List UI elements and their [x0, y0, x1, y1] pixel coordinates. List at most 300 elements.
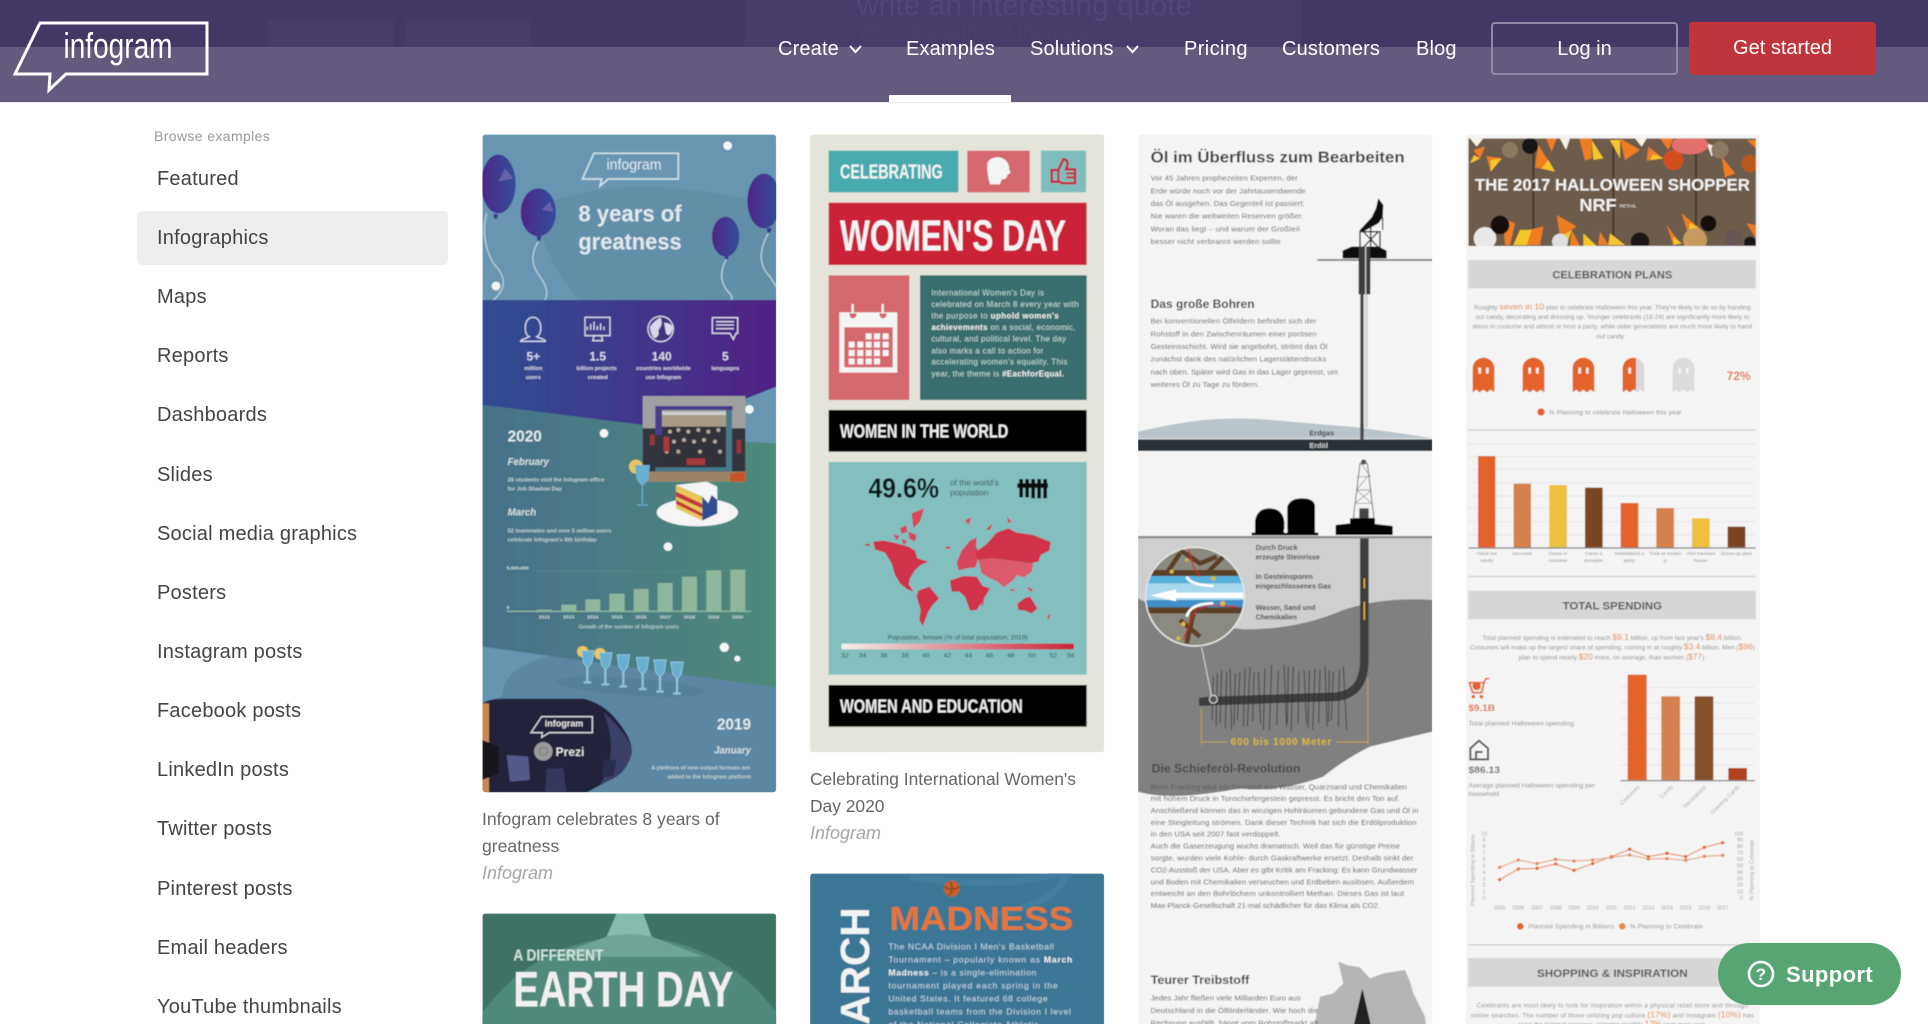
caption: Infogram celebrates 8 years: Infogram [482, 863, 553, 883]
bar chart: infogram users growth: 2019 [708, 615, 719, 621]
nav: Customers: Customers [1282, 38, 1380, 60]
line chart: spending trend: % Planning to Celebrate [1630, 924, 1703, 931]
panel: world map: 49.6% [868, 472, 939, 503]
bar chart: infogram users growth: 2015 [611, 615, 623, 621]
bar chart: spending categories: Costumes [1619, 784, 1642, 807]
sidebar navigation: Email headers [157, 937, 288, 959]
bar chart: celebration activities: Trick-or-treatin [1649, 551, 1681, 557]
sidebar navigation: Infographics [157, 227, 269, 249]
line chart: spending trend: 1 [1483, 889, 1486, 895]
heading bar: total spending [1468, 591, 1756, 619]
stat: 140 countries: use Infogram [646, 375, 681, 381]
text block: das grosse bohren: Das große Bohren [1151, 297, 1255, 311]
text block: das grosse bohren: nach oben. Später wird Gas in das Lager gepresst, um [1151, 367, 1338, 376]
text block: about women's day: cultural, and political level. The day [931, 335, 1066, 344]
caption: Infogram celebrates 8 years [482, 809, 720, 883]
panel: world map [829, 462, 1087, 675]
icon: pump jack [1343, 198, 1387, 258]
bar chart: infogram users growth: 5,000,000 [507, 566, 529, 572]
image: Prezi office photo: infogram [545, 719, 583, 729]
labels: fracking callouts: Durch Druck [1256, 545, 1298, 552]
text: 2019 timeline: A plethora of new output formats are [651, 765, 750, 771]
line chart: spending trend: 80 [1737, 844, 1743, 850]
text block: total spending: Total planned spending is estimated to reach $9.1 billion, up from last year's $8.4 billion. [1482, 632, 1743, 642]
header bar: Who's the author of the quote? [857, 22, 1103, 42]
button: Support [1718, 943, 1901, 1005]
text block: March Madness description: Madness – is a single-elimination [888, 967, 1037, 977]
icon: row of glasses [577, 646, 683, 694]
sidebar navigation [137, 128, 448, 1018]
text: 2019 timeline: 2019 [717, 717, 751, 734]
line chart: spending trend [1468, 831, 1756, 945]
panel: Women's Day infographic [810, 134, 1104, 752]
nav: Pricing: Pricing [1184, 38, 1248, 60]
text block: about women's day: also marks a call to action for [931, 346, 1044, 355]
legend: population female scale: 40 [922, 652, 930, 659]
button: Log in: Log in [1557, 38, 1612, 60]
text block: intro [1151, 174, 1306, 246]
legend: population female scale: 46 [986, 652, 993, 659]
stat: 86.13 per household: $86.13 [1468, 765, 1500, 775]
bar chart: celebration activities: g [1664, 558, 1667, 564]
text block: die schieferoel revolution: und Boden mit Chemikalien verseuchen und Erdbeben auslösen. Außerdem [1151, 877, 1414, 886]
text block: die schieferoel revolution: mit hohem Druck in Tonschiefergestein gepresst. Es bricht den Ton auf. [1151, 794, 1400, 803]
line chart: spending trend: 10 [1481, 831, 1487, 837]
heading: March Madness [832, 901, 1073, 1024]
text block: das grosse bohren: Gesteinsschicht. Wird sie angebohrt, strömt das Öl [1151, 342, 1328, 351]
icon: infogram logo small: infogram [606, 157, 661, 173]
bar chart: infogram users growth: 2013 [563, 615, 574, 621]
stat: 5 languages: languages [711, 366, 739, 372]
banner: celebrating: CELEBRATING [840, 162, 943, 184]
image: Prezi office photo [482, 699, 632, 792]
text block: March Madness description [888, 941, 1072, 1024]
nav: Create: Create [778, 38, 839, 60]
text block: about women's day: International Women's Day is [931, 289, 1044, 298]
line chart: spending trend: 10 [1737, 889, 1743, 895]
text block: celebration plans: out candy, decorating and dressing up. Younger celebrants (18-24) are significantly more likely to [1475, 314, 1750, 321]
sidebar navigation: Slides [157, 464, 213, 486]
text block: about women's day [920, 275, 1087, 400]
heading: women and education: WOMEN AND EDUCATION [840, 696, 1023, 717]
text block: March Madness description: Tournament – popularly known as March [888, 954, 1072, 964]
stat: 1.5 billion projects: 1.5 [589, 350, 606, 364]
icon: chevron create [849, 45, 862, 54]
sidebar navigation: Maps [157, 286, 207, 308]
line chart: spending trend: Planned Spending in Billions [1471, 834, 1477, 906]
legend: population female scale: 48 [1007, 652, 1015, 659]
sidebar navigation: Browse examples [154, 128, 270, 144]
text block: das grosse bohren: Rohstoff in den Zwischenräumen einer porösen [1151, 329, 1317, 338]
illustration: conventional well: Erdöl [1309, 441, 1328, 450]
line chart: spending trend: 2011 [1606, 905, 1617, 911]
labels: fracking callouts: In Gesteinsporen [1256, 574, 1313, 581]
line chart: spending trend: 0 [1740, 895, 1743, 901]
text block: about women's day: the purpose to uphold women's [931, 312, 1059, 321]
bar chart: celebration activities: Decorate [1512, 551, 1533, 557]
bar chart: spending categories: Greeting Cards [1710, 784, 1742, 816]
text: 2020 timeline [508, 428, 611, 543]
text block: das grosse bohren: zunächst dank des natürlichen Lagerstättendrucks [1151, 355, 1327, 364]
text block: die schieferoel revolution: entweicht an den Bohrlöchern unkontrolliert Methan. Dieses Gas ist laut [1151, 889, 1405, 898]
text block: teurer treibstoff: Teurer Treibstoff [1151, 973, 1250, 987]
stat: 5+ million users: 5+ [526, 350, 540, 364]
icon: question mark circle: ? [1756, 965, 1766, 984]
heading: March Madness: MADNESS [889, 901, 1073, 938]
legend: population female scale: 34 [859, 652, 866, 659]
text block: intro: Vor 45 Jahren prophezeiten Experten, der [1151, 174, 1298, 183]
icon: infogram logo small [582, 153, 678, 186]
image: candy header [1468, 136, 1759, 252]
bar chart: celebration activities: house [1694, 558, 1708, 564]
heading: 8 years of greatness: 8 years of [578, 201, 682, 227]
heading bar: total spending: TOTAL SPENDING [1563, 600, 1662, 612]
shale fissures [1212, 665, 1347, 732]
text block: teurer treibstoff: Deutschland in die Ölförderländer. Wie hoch die [1151, 1006, 1318, 1015]
sidebar navigation: Facebook posts [157, 700, 301, 722]
icon: speech bubble [712, 318, 738, 339]
text block: total spending: Costumes will make up the largest share of spending, coming in at roughly $3.4 billion. Men ($96) [1470, 642, 1755, 652]
text block: March Madness description: tournament played each spring in the [888, 980, 1058, 990]
line chart: spending trend: 2012 [1624, 905, 1636, 911]
text: 2020 timeline: 28 students visit the Infogram office [508, 478, 604, 484]
line chart: spending trend: 2008 [1550, 905, 1562, 911]
panel: Earth Day infographic: EARTH DAY [513, 962, 733, 1018]
icon: globe [648, 316, 673, 342]
heading bar: celebration plans: CELEBRATION PLANS [1552, 270, 1673, 282]
bar chart: infogram users growth: 2018 [684, 615, 695, 621]
heading bar: celebration plans [1468, 260, 1756, 288]
panel: Earth Day infographic: A DIFFERENT [513, 948, 604, 965]
heading: 8 years of greatness [578, 201, 682, 254]
stat: 5 languages [711, 350, 739, 372]
stat: 140 countries: countries worldwide [636, 366, 691, 372]
icon: chevron solutions [1126, 45, 1139, 54]
banner: women's day [829, 203, 1087, 265]
line chart: spending trend: 2010 [1587, 905, 1599, 911]
icon row: ghosts 72 percent: % Planning to celebrate Halloween this year [1549, 409, 1682, 416]
line chart: spending trend: 2015 [1680, 905, 1692, 911]
panel: March Madness infographic [810, 873, 1104, 1024]
text block: die schieferoel revolution: Anschließend können das in winzigen Hohlräumen gebundene Gas und Öl in [1151, 806, 1418, 815]
stat: 1.5 billion projects: billion projects [577, 366, 617, 372]
sidebar navigation: YouTube thumbnails [157, 996, 342, 1018]
dimension: 600 bis 1000 meter [1201, 678, 1368, 748]
bar chart: infogram users growth: 2017 [660, 615, 671, 621]
stat: 1.5 billion projects [577, 350, 617, 381]
text: 2020 timeline: February [508, 457, 550, 468]
bar chart: spending categories: Candy [1659, 784, 1675, 800]
nav: Solutions: Solutions [1030, 38, 1114, 60]
bar chart: celebration activities: Visit haunted [1686, 551, 1715, 557]
caption: Celebrating International Women's Day [810, 769, 1076, 843]
text block: about women's day: year, the theme is #EachforEqual. [931, 369, 1064, 378]
labels: fracking callouts [1256, 545, 1331, 621]
text block: die schieferoel revolution: sorgte, wurden viele Kohle- durch Gaskraftwerke ersetzt. Deshalb sinkt der [1151, 854, 1414, 863]
stat: 9.1B total spending [1468, 703, 1574, 728]
icon: calendar [829, 275, 909, 400]
button: Get started [1689, 22, 1876, 75]
bar chart: celebration activities: Carve a [1585, 551, 1603, 557]
text block: die schieferoel revolution: Die Schieferöl-Revolution [1152, 761, 1300, 775]
labels: fracking callouts: erzeugte Steinrisse [1256, 555, 1320, 562]
icon: drilling rig [1336, 459, 1393, 535]
text block: March Madness description: The NCAA Division I Men's Basketball [888, 941, 1054, 951]
icon: user [521, 317, 545, 341]
stat: 9.1B total spending: $9.1B [1468, 703, 1495, 713]
heading: halloween shopper: NRF [1579, 195, 1617, 215]
line chart: spending trend: 2014 [1661, 905, 1673, 911]
text: 2020 timeline: celebrate Infogram's 8th birthday [508, 537, 598, 543]
icon: Germany map with spike [1310, 962, 1430, 1024]
line chart: spending trend: 100 [1734, 831, 1743, 837]
text block: March Madness description: United States. It featured 68 college [888, 994, 1048, 1004]
text block: celebration plans: Roughly seven in 10 plan to celebrate Halloween this year. They're likely to do so by handing [1474, 301, 1751, 311]
line chart: spending trend: 4 [1483, 870, 1486, 876]
line chart: spending trend: 2007 [1531, 905, 1543, 911]
line chart: spending trend: 2017 [1717, 905, 1729, 911]
text block: intro: Erde würde noch vor der Jahrtausendwende [1151, 186, 1306, 195]
text block: teurer treibstoff: Jedes Jahr fließen viele Milliarden Euro aus [1151, 993, 1301, 1002]
text block: intro: besser nicht verbrannt werden sollte [1151, 237, 1281, 246]
dimension: 600 bis 1000 meter: 600 bis 1000 Meter [1231, 737, 1331, 748]
section: stats band [482, 300, 776, 425]
card artwork layer [482, 134, 1760, 1024]
text block: die schieferoel revolution: eine Steigleitung strömen. Dank dieser Technik hat sich die Erdölproduktion [1151, 818, 1417, 827]
bar chart: infogram users growth: Growth of the number of Infogram users [579, 625, 679, 631]
labels: fracking callouts: eingeschlossenes Gas [1256, 583, 1331, 590]
legend: population female scale [841, 634, 1075, 659]
chart: choropleth map [864, 508, 1051, 626]
panel: world map: population [950, 487, 989, 497]
stat: 140 countries: 140 [652, 350, 672, 364]
panel: Halloween shopper infographic [1466, 134, 1760, 1024]
icon: question mark circle [1748, 960, 1774, 988]
bar chart: infogram users growth: 2020 [732, 615, 743, 621]
icon: monitor [585, 317, 610, 341]
legend: population female scale: 44 [965, 652, 972, 659]
sidebar navigation: Reports [157, 345, 229, 367]
icon: head profile [967, 151, 1030, 192]
text block: shopping and inspiration: online searches. The number of those utilizing pop culture (17%) and Instagram (10%) has [1471, 1009, 1754, 1019]
line chart: spending trend: 7 [1483, 851, 1486, 857]
caption: Infogram celebrates 8 years: Infogram celebrates 8 years of greatness [482, 809, 720, 856]
label: Support: Support [1786, 962, 1873, 987]
stat: 86.13 per household [1468, 765, 1596, 798]
icon: balloons [481, 155, 781, 300]
nav: Examples: Examples [906, 38, 995, 60]
sidebar navigation: LinkedIn posts [157, 759, 289, 781]
legend: population female scale: 32 [841, 652, 849, 659]
heading: women in the world [829, 410, 1087, 452]
text block: celebration plans: out candy. [1596, 333, 1625, 340]
stat: 86.13 per household: Average planned Halloween spending per [1468, 782, 1596, 789]
icon: basketball [944, 881, 960, 897]
stat: 5+ million users: million [524, 366, 543, 372]
active nav indicator [889, 95, 1011, 102]
text block: celebration plans: dress in costume and attend or host a party, while older generations are much more likely to hand [1473, 324, 1752, 331]
labels: fracking callouts: Chemikalien [1256, 614, 1297, 621]
bar chart: celebration activities [1468, 430, 1756, 576]
text: 2019 timeline: January [714, 745, 752, 756]
text block: die schieferoel revolution: Beim Fracking wird ein Gemisch aus Wasser, Quarzsand und Chemikalien [1151, 782, 1407, 791]
sidebar navigation: Featured [157, 168, 239, 190]
bar chart: infogram users growth: 2016 [635, 615, 647, 621]
line chart: spending trend: Planned Spending in Billions [1528, 924, 1614, 931]
stat: 140 countries [636, 350, 691, 381]
heading bar: shopping and inspiration: SHOPPING & INSPIRATION [1537, 968, 1688, 980]
sidebar navigation: Instagram posts [157, 641, 303, 663]
line chart: spending trend: 30 [1737, 876, 1743, 882]
text: 2019 timeline: added to the Infogram platform [667, 774, 751, 780]
text block: March Madness description: basketball teams from the Division I level [888, 1007, 1071, 1017]
text block: intro: Nie waren die weltweiten Reserven größer. [1151, 212, 1303, 221]
icon row: ghosts 72 percent: 72% [1727, 369, 1751, 383]
text block: about women's day: accelerating women's equality. This [931, 358, 1067, 367]
legend: population female scale: 38 [901, 652, 909, 659]
nav: Blog: Blog [1416, 38, 1457, 60]
heading: halloween shopper: RETAIL [1619, 203, 1637, 209]
line chart: spending trend: 2009 [1568, 905, 1580, 911]
text block: intro: das Öl ausgehen. Das Gegenteil ist passiert: [1151, 199, 1305, 208]
line chart: spending trend: 40 [1737, 870, 1743, 876]
icon: cocktail glass [629, 460, 650, 505]
line chart: spending trend: 9 [1483, 838, 1486, 844]
stat: 9.1B total spending: Total planned Halloween spending [1468, 721, 1574, 728]
line chart: spending trend: 2 [1483, 883, 1486, 889]
text block: total spending [1470, 632, 1755, 661]
well pipe [1203, 538, 1364, 701]
line chart: spending trend: 5 [1483, 863, 1486, 869]
panel: Infogram 8 years infographic [481, 134, 781, 793]
legend: population female scale: 54 [1067, 652, 1075, 659]
illustration: conventional well: Erdgas [1309, 428, 1334, 437]
line chart: spending trend: 20 [1737, 883, 1743, 889]
illustration: fracking cross-section [1138, 459, 1432, 796]
text block: shopping and inspiration [1471, 1003, 1754, 1024]
text block: das grosse bohren: weiteres Öl zu Tage zu fördern. [1150, 380, 1259, 389]
heading: oil title: Öl im Überfluss zum Bearbeiten [1151, 147, 1405, 166]
sidebar navigation: Posters [157, 582, 226, 604]
text block: celebration plans [1473, 301, 1752, 340]
legend: population female scale: 50 [1028, 652, 1036, 659]
icon: gas tanks [1252, 498, 1318, 535]
sidebar navigation: Pinterest posts [157, 878, 293, 900]
bar chart: spending categories [1619, 675, 1755, 816]
circle inset: fracture detail [1143, 547, 1247, 646]
icon: shopping cart [1469, 679, 1489, 698]
sidebar navigation: Dashboards [157, 404, 267, 426]
banner: women's day: WOMEN'S DAY [840, 212, 1066, 261]
icon: people [1017, 479, 1048, 498]
text block: teurer treibstoff [1151, 973, 1318, 1024]
panel: world map: of the world's [950, 477, 999, 487]
bar chart: celebration activities: party [1624, 558, 1635, 564]
bar chart: celebration activities: costume [1549, 558, 1568, 564]
text block: die schieferoel revolution: Max-Planck-Gesellschaft 21-mal schädlicher für das Klima als CO2. [1151, 901, 1380, 910]
text block: das grosse bohren [1150, 297, 1338, 389]
bar chart: infogram users growth [507, 566, 751, 631]
panel: oil fracking infographic [1138, 134, 1432, 1024]
bar chart: spending categories: Decorations [1682, 784, 1708, 810]
stat: 5 languages: 5 [722, 350, 729, 364]
heading bar: shopping and inspiration [1468, 958, 1756, 987]
bar chart: celebration activities: pumpkin [1584, 558, 1603, 564]
labels: fracking callouts: Wasser, Sand und [1256, 605, 1316, 612]
text: 2020 timeline: 52 teammates and over 5 million users [508, 528, 611, 534]
heading: women and education [829, 685, 1087, 727]
sidebar navigation: Social media graphics [157, 523, 357, 545]
bar chart: celebration activities: Host/attend a [1615, 551, 1644, 557]
line chart: spending trend: 2006 [1512, 905, 1524, 911]
text: 2020 timeline: March [508, 508, 536, 519]
text block: total spending: plan to spend nearly $20 more, on average, than women ($77). [1519, 651, 1706, 661]
panel: Earth Day infographic [482, 914, 776, 1024]
section: green timeline background [482, 405, 776, 688]
line chart: spending trend: 2005 [1494, 905, 1506, 911]
heading: women in the world: WOMEN IN THE WORLD [840, 421, 1008, 442]
bar chart: celebration activities: Hand out [1477, 551, 1497, 557]
legend: population female scale: 36 [880, 652, 888, 659]
text block: about women's day: achievements on a social, economic, [931, 323, 1075, 332]
line chart: spending trend: 6 [1483, 857, 1486, 863]
text block: die schieferoel revolution: Auch die Gaserzeugung wuchs dramatisch. Weil das für günstige Preise [1151, 842, 1400, 851]
banner: celebrating [829, 151, 958, 192]
text block: die schieferoel revolution [1151, 761, 1418, 910]
bar chart: infogram users growth: 0 [507, 605, 510, 611]
image: Prezi office photo: Prezi [556, 745, 584, 759]
button: Get started: Get started [1733, 37, 1832, 59]
stat: 5+ million users [524, 350, 543, 381]
illustration: conventional well [1138, 247, 1432, 451]
heading: halloween shopper [1475, 176, 1750, 215]
line chart: spending trend: % Planning to Celebrate [1750, 839, 1756, 901]
text block: das grosse bohren: Bei konventionellen Ölfeldern befindet sich der [1151, 317, 1317, 326]
heading: halloween shopper: THE 2017 HALLOWEEN SHOPPER [1475, 176, 1750, 195]
bar chart: infogram users growth: 2014 [587, 615, 598, 621]
legend: population female scale: 52 [1050, 652, 1057, 659]
bar chart: celebration activities: candy [1480, 558, 1494, 564]
line chart: spending trend: 2016 [1698, 905, 1710, 911]
line chart: spending trend: 50 [1737, 863, 1743, 869]
text block: die schieferoel revolution: CO2-Ausstoß der USA. Aber es gibt Kritik am Fracking: Es kann Grundwasser [1151, 865, 1418, 874]
image: team photo [643, 396, 745, 482]
line chart: spending trend: 3 [1483, 876, 1486, 882]
legend: population female scale: Population, female (% of total population, 2019) [888, 634, 1028, 641]
logo: infogram speech bubble: infogram [64, 25, 172, 66]
icon: thumbs up [1041, 151, 1086, 192]
logo: infogram speech bubble [12, 22, 208, 94]
text: 2020 timeline: for Job Shadow Day [508, 487, 563, 493]
text: 2020 timeline: 2020 [508, 428, 542, 445]
stat: 86.13 per household: household [1468, 791, 1499, 798]
icon row: ghosts 72 percent [1473, 358, 1751, 416]
stat: 1.5 billion projects: created [588, 375, 608, 381]
header bar [0, 0, 1928, 103]
text block: die schieferoel revolution: in den USA seit 2007 fast verdoppelt. [1151, 830, 1281, 839]
text block: about women's day: celebrated on March 8 every year with [931, 300, 1079, 309]
text block: shopping and inspiration: Celebrants are most likely to look for inspiration within a physical retail store and through [1476, 1003, 1749, 1010]
button: Log in [1491, 22, 1678, 75]
icon: birthday cake [657, 482, 738, 526]
caption: Celebrating International Women's Day: Infogram [810, 823, 881, 843]
sidebar navigation: Twitter posts [157, 818, 272, 840]
line chart: spending trend: 2013 [1642, 905, 1654, 911]
line chart: spending trend: 70 [1737, 851, 1743, 857]
bar chart: celebration activities: Dress in [1549, 551, 1567, 557]
bar chart: celebration activities: Dress up pets [1721, 551, 1752, 557]
line chart: spending trend: 60 [1737, 857, 1743, 863]
